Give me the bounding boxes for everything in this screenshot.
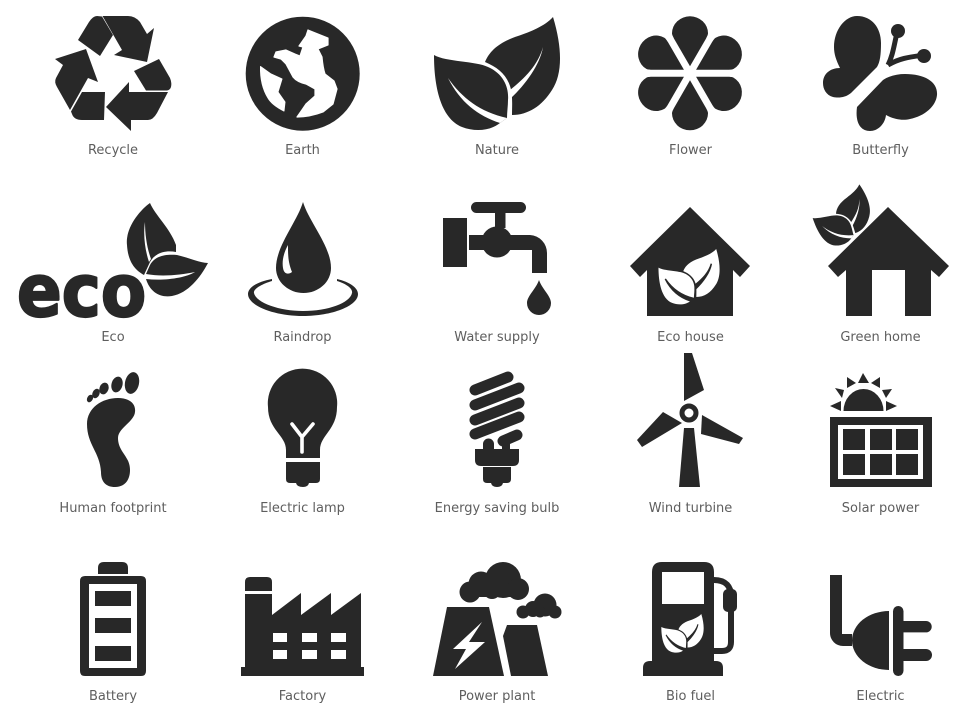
label: Recycle: Recycle [88, 143, 138, 158]
cell: human footprint [59, 371, 167, 516]
icon: green home [807, 183, 949, 316]
label: Human footprint: Human footprint [59, 501, 167, 516]
cell: eco house [630, 207, 750, 345]
cell: electric [830, 575, 932, 704]
label: Nature: Nature [475, 143, 519, 158]
icon: earth [246, 17, 360, 131]
icon: eco house [630, 207, 750, 316]
cell: energy saving bulb [435, 377, 559, 516]
cell: battery [80, 562, 146, 704]
cell: eco [17, 203, 208, 345]
icon: raindrop [248, 202, 358, 316]
icon: eco logo with leaves: eco [17, 250, 146, 334]
icon: butterfly [823, 16, 937, 131]
label: Solar power: Solar power [842, 501, 920, 516]
label: Factory: Factory [279, 689, 327, 704]
label: Battery: Battery [89, 689, 137, 704]
icon: light bulb [268, 369, 337, 487]
icon: bio fuel pump [643, 562, 737, 676]
cell: flower [632, 16, 748, 158]
cell: butterfly [823, 16, 937, 158]
label: Power plant: Power plant [459, 689, 535, 704]
icon: electric plug [830, 575, 932, 676]
cell: raindrop [248, 202, 358, 345]
icon: factory [241, 577, 364, 676]
cell: earth [246, 17, 360, 158]
label: Electric lamp: Electric lamp [260, 501, 345, 516]
label: Bio fuel: Bio fuel [666, 689, 715, 704]
label: Green home: Green home [840, 330, 921, 345]
label: Eco: Eco [101, 330, 125, 345]
cell: bio fuel [643, 562, 737, 704]
icon: recycle [55, 16, 171, 131]
cell: solar power [830, 373, 932, 516]
label: Flower: Flower [669, 143, 713, 158]
icon: water tap with drop [443, 202, 551, 315]
cell: green home [807, 183, 949, 345]
icon: nature leaves [434, 17, 560, 130]
label: Raindrop: Raindrop [273, 330, 332, 345]
icon: eco logo with leaves [17, 203, 208, 334]
label: Eco house: Eco house [657, 330, 724, 345]
cell: nature [434, 17, 560, 158]
cell: water supply [443, 202, 551, 345]
label: Wind turbine: Wind turbine [649, 501, 732, 516]
label: Water supply: Water supply [454, 330, 540, 345]
label: Energy saving bulb: Energy saving bulb [435, 501, 559, 516]
icon: wind turbine [637, 353, 743, 487]
cell: wind turbine [637, 353, 743, 516]
icon: energy saving bulb [475, 377, 519, 487]
cell: electric lamp [260, 369, 345, 516]
icon: battery [80, 562, 146, 676]
label: Butterfly: Butterfly [852, 143, 909, 158]
cell: factory [241, 577, 364, 704]
cell: power plant [433, 562, 562, 704]
cell: recycle [55, 16, 171, 158]
icon: footprint [86, 371, 141, 487]
icon: power plant [433, 562, 562, 676]
icon: flower [632, 16, 748, 130]
icon: sun over solar panel [830, 373, 932, 487]
label: Electric: Electric [856, 689, 905, 704]
label: Earth: Earth [285, 143, 320, 158]
